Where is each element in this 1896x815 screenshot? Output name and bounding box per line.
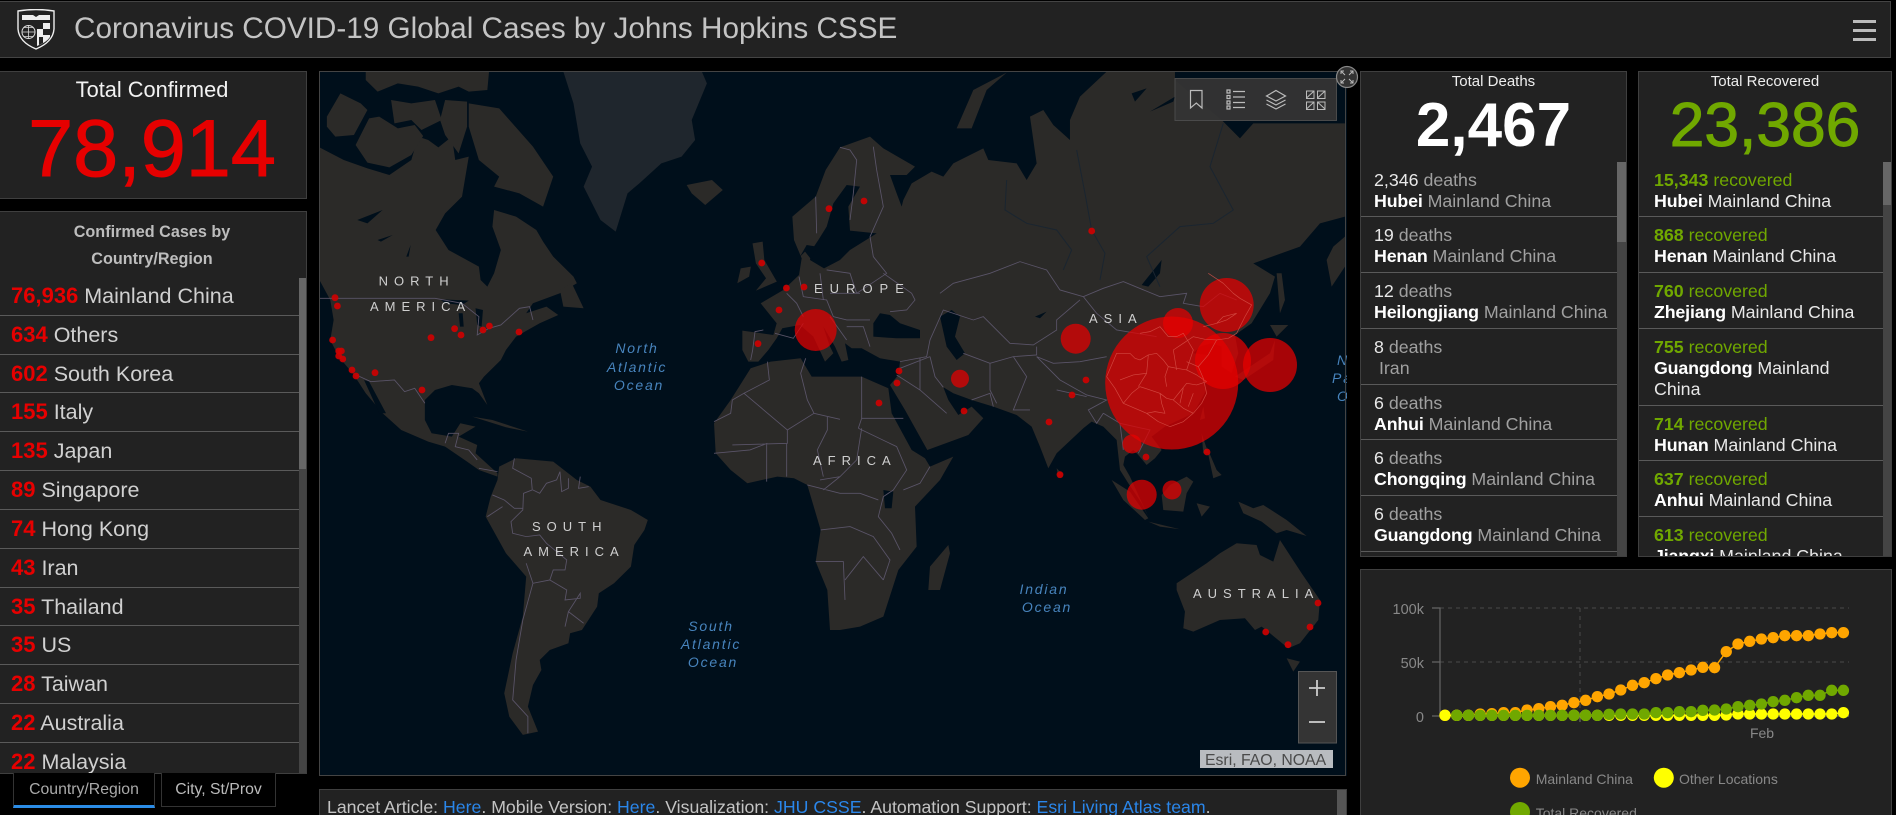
map: Americas and Atlantic land — [319, 72, 777, 735]
label: Indian Ocean: Indian — [1020, 581, 1068, 597]
icon: zoom out — [1309, 721, 1325, 723]
row: Chongqing deaths — [1361, 440, 1618, 496]
row: Taiwan: 28 Taiwan — [11, 671, 108, 696]
y axis labels: 0 — [1416, 710, 1424, 726]
label: Asia: ASIA — [1089, 311, 1143, 326]
footer scrollbar — [1337, 790, 1346, 815]
row: Hubei recovered: 15,343 recovered — [1654, 170, 1792, 190]
row: Japan: 135 Japan — [11, 438, 112, 463]
row: Iran — [0, 549, 299, 588]
row: Hubei deaths: Hubei Mainland China — [1374, 190, 1551, 210]
row: Hunan recovered: 714 recovered — [1654, 414, 1768, 434]
list heading: Country/Region — [91, 250, 213, 268]
row: Jiangxi recovered: 613 recovered — [1654, 525, 1768, 545]
row: Others: 634 Others — [11, 322, 118, 347]
legend: Mainland China — [1510, 768, 1633, 788]
y axis labels — [1393, 602, 1425, 726]
label: North Atlantic Ocean: Atlantic — [606, 359, 667, 375]
row: Hubei deaths: 2,346 deaths — [1374, 170, 1477, 190]
label: South America: AMERICA — [524, 544, 625, 559]
row: Chongqing deaths: 6 deaths — [1374, 448, 1442, 468]
row: Hubei deaths — [1361, 162, 1618, 217]
row: Chongqing deaths: Chongqing Mainland China — [1374, 469, 1595, 489]
row: Hong Kong — [0, 510, 299, 549]
deaths list — [1361, 170, 1617, 552]
icon: bookmark — [1190, 90, 1202, 108]
row: Zhejiang recovered: 760 recovered — [1654, 281, 1768, 301]
row: Italy: 155 Italy — [11, 399, 93, 424]
row: Australia — [0, 704, 299, 743]
label: North Atlantic Ocean: Ocean — [614, 377, 664, 393]
recovered value: 23,386 — [1670, 91, 1860, 160]
row: Iran deaths — [1361, 329, 1618, 385]
panel: total deaths — [1360, 71, 1627, 557]
row: Thailand — [0, 588, 299, 626]
icon: basemap gallery — [1306, 91, 1325, 110]
country list — [0, 283, 299, 774]
row: Heilongjiang deaths: Heilongjiang Mainland China — [1374, 302, 1607, 322]
label: South Atlantic Ocean: South — [688, 618, 734, 634]
x axis label: Feb — [1750, 725, 1774, 741]
row: Hunan recovered: Hunan Mainland China — [1654, 435, 1837, 455]
row: Italy — [0, 393, 299, 432]
Australia — [1177, 540, 1320, 672]
series: Total Recovered — [1457, 690, 1843, 715]
row: Hubei recovered: Hubei Mainland China — [1654, 190, 1831, 210]
icon: legend list — [1227, 90, 1245, 109]
row: Henan deaths — [1361, 217, 1618, 273]
legend: Total Recovered — [1510, 802, 1637, 815]
row: Heilongjiang deaths: 12 deaths — [1374, 281, 1452, 301]
row: Guangdong deaths: 6 deaths — [1374, 504, 1442, 524]
row: Henan deaths: Henan Mainland China — [1374, 246, 1556, 266]
icon: zoom in — [1309, 680, 1325, 696]
row: Malaysia: 22 Malaysia — [11, 749, 126, 774]
label: North Atlantic Ocean: North — [615, 340, 659, 356]
label: North America: NORTH — [379, 274, 455, 288]
row: Thailand: 35 Thailand — [11, 594, 124, 619]
label: South Atlantic Ocean: Atlantic — [680, 636, 741, 652]
tab: Country/Region: Country/Region — [29, 781, 139, 798]
ocean labels — [606, 340, 1387, 670]
label: North America: AMERICA — [370, 299, 471, 314]
row: Mainland China: 76,936 Mainland China — [11, 283, 234, 308]
row: US — [0, 626, 299, 665]
label: Indian Ocean: Ocean — [1022, 599, 1072, 615]
icon: expand map button — [1336, 66, 1358, 88]
South America — [486, 458, 648, 735]
title: Coronavirus COVID-19 Global Cases by Johns Hopkins CSSE — [74, 12, 897, 45]
borders: North and South America — [319, 298, 589, 733]
y axis labels: 50k — [1401, 656, 1425, 672]
row: Singapore: 89 Singapore — [11, 477, 139, 502]
row: Henan deaths: 19 deaths — [1374, 225, 1452, 245]
scrollbar — [299, 278, 306, 773]
panel: time-series chart — [1360, 569, 1892, 815]
panel: world map — [319, 71, 1347, 776]
deaths scrollbar — [1617, 162, 1626, 556]
row: Japan — [0, 432, 299, 471]
recovered list — [1639, 170, 1883, 556]
legend: Mainland China: Mainland China — [1536, 771, 1633, 787]
attribution: Esri, FAO, NOAA — [1205, 752, 1327, 769]
row: Henan recovered: 868 recovered — [1654, 225, 1768, 245]
row: Anhui recovered: 637 recovered — [1654, 469, 1768, 489]
legend: Other Locations: Other Locations — [1679, 771, 1778, 787]
row: Guangdong deaths — [1361, 496, 1618, 552]
icon: layers — [1266, 90, 1286, 109]
row: Guangdong recovered — [1639, 329, 1883, 406]
list heading: Confirmed Cases by — [74, 223, 230, 241]
row: Iran deaths: 8 deaths — [1374, 337, 1442, 357]
row: South Korea: 602 South Korea — [11, 361, 173, 386]
small case dots — [329, 198, 1321, 648]
row: Hubei recovered — [1639, 162, 1883, 217]
map toolbar — [1175, 78, 1336, 120]
row: Mainland China — [0, 277, 299, 316]
panel: total recovered — [1638, 71, 1892, 557]
line chart — [1393, 602, 1850, 815]
row: Taiwan — [0, 665, 299, 704]
icon: hamburger menu — [1853, 20, 1876, 41]
y axis labels: 100k — [1393, 602, 1425, 618]
row: Zhejiang recovered: Zhejiang Mainland China — [1654, 302, 1854, 322]
row: Guangdong recovered: Guangdong Mainland — [1654, 358, 1830, 378]
row: Hong Kong: 74 Hong Kong — [11, 516, 149, 541]
row: Iran: 43 Iran — [11, 555, 79, 580]
row: Anhui recovered — [1639, 461, 1883, 517]
label: Australia: AUSTRALIA — [1193, 586, 1319, 601]
recovered scrollbar — [1883, 162, 1891, 556]
label: South America: SOUTH — [532, 519, 608, 534]
row: South Korea — [0, 355, 299, 393]
label: South Atlantic Ocean: Ocean — [688, 654, 738, 670]
series: Mainland China — [1445, 633, 1843, 715]
row: Anhui deaths — [1361, 385, 1618, 440]
legend: Other Locations — [1654, 768, 1778, 788]
tab: City, St/Prov: City, St/Prov — [175, 781, 262, 798]
row: Malaysia — [0, 743, 299, 782]
panel: total confirmed — [0, 71, 307, 199]
list heading — [74, 223, 230, 268]
recovered label: Total Recovered — [1711, 73, 1819, 90]
map labels — [370, 274, 1319, 601]
row: Henan recovered: Henan Mainland China — [1654, 246, 1836, 266]
footer links bar — [319, 789, 1347, 815]
zoom controls — [1298, 672, 1336, 743]
row: Anhui deaths: 6 deaths — [1374, 393, 1442, 413]
panel: confirmed cases by country — [0, 211, 307, 774]
row: Australia: 22 Australia — [11, 710, 124, 735]
total confirmed value: 78,914 — [28, 104, 276, 194]
row: US: 35 US — [11, 632, 71, 657]
row: Heilongjiang deaths — [1361, 273, 1618, 329]
row: Iran deaths: Iran — [1379, 358, 1410, 378]
row: Guangdong recovered: China — [1654, 379, 1700, 399]
header bar — [0, 1, 1891, 58]
row: Singapore — [0, 471, 299, 510]
row: Others — [0, 316, 299, 355]
row: Zhejiang recovered — [1639, 273, 1883, 329]
icon: Johns Hopkins shield logo — [17, 9, 55, 50]
tab: City, St/Prov — [161, 773, 276, 807]
row: Anhui recovered: Anhui Mainland China — [1654, 490, 1832, 510]
tab: Country/Region — [13, 773, 155, 808]
series: Other Locations — [1445, 713, 1843, 715]
row: Jiangxi recovered — [1639, 517, 1883, 573]
deaths value: 2,467 — [1416, 91, 1571, 160]
total confirmed label: Total Confirmed — [76, 77, 228, 102]
row: Guangdong deaths: Guangdong Mainland China — [1374, 525, 1601, 545]
row: Hunan recovered — [1639, 406, 1883, 461]
label: Europe: EUROPE — [814, 281, 911, 296]
map: Eurasia, Africa and Oceania land — [714, 72, 1345, 672]
row: Henan recovered — [1639, 217, 1883, 273]
case bubbles — [795, 278, 1297, 510]
row: Anhui deaths: Anhui Mainland China — [1374, 414, 1552, 434]
row: Guangdong recovered: 755 recovered — [1654, 337, 1768, 357]
label: Africa: AFRICA — [813, 453, 897, 468]
deaths label: Total Deaths — [1452, 73, 1535, 90]
borders: Europe, Africa and Asia — [714, 147, 1237, 600]
China province borders — [1107, 273, 1252, 427]
